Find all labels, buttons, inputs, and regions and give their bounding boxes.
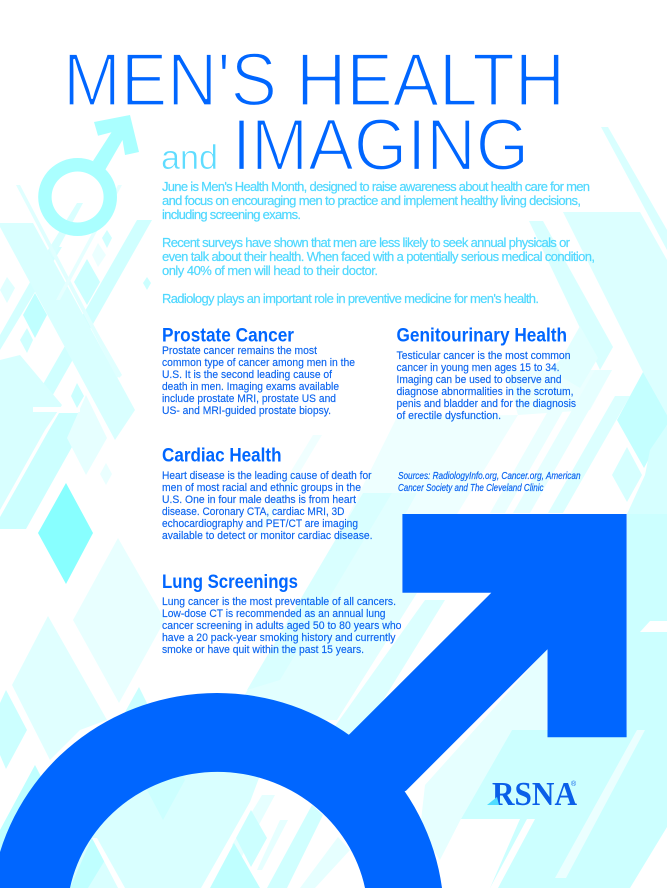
panel: lung screenings: Low-dose CT is recommended as an annual lung [162,608,386,620]
panel: prostate cancer [162,326,355,417]
panel: cardiac health: U.S. One in four male deaths is from heart [162,494,357,506]
panel: genitourinary health: diagnose abnormalities in the scrotum, [396,386,574,398]
panel: genitourinary health: of erectile dysfunction. [396,410,501,422]
intro text: including screening exams. [162,207,301,222]
panel: lung screenings: cancer screening in adults aged 50 to 80 years who [162,620,402,632]
intro text [162,179,595,306]
title: IMAGING [232,103,529,186]
pale bands in the centre [230,415,518,770]
panel: prostate cancer: common type of cancer among men in the [162,357,355,369]
title [63,38,565,186]
panel: genitourinary health: cancer in young men ages 15 to 34. [396,362,560,374]
panel: prostate cancer: include prostate MRI, prostate US and [162,393,336,405]
icon: large male symbol [0,514,627,888]
panel: genitourinary health: penis and bladder and for the diagnosis [396,398,576,410]
right side shapes [420,127,667,888]
panel: lung screenings: Lung Screenings [162,572,298,593]
panel: prostate cancer: Prostate cancer remains the most [162,345,318,357]
panel: cardiac health: Cardiac Health [162,446,282,466]
inside of the large ring [60,687,350,888]
title: and [161,139,218,177]
panel: cardiac health: available to detect or monitor cardiac disease. [162,530,372,542]
panel: prostate cancer: US- and MRI-guided prostate biopsy. [162,405,331,417]
intro text: and focus on encouraging men to practice and implement healthy living decisions, [162,193,581,208]
panel: cardiac health [162,446,372,542]
panel: prostate cancer: death in men. Imaging exams available [162,381,339,393]
icon: aqua diamond [38,483,93,584]
sources note: Cancer Society and The Cleveland Clinic [398,483,544,494]
panel: lung screenings: have a 20 pack-year smoking history and currently [162,632,396,644]
intro text: Recent surveys have shown that men are less likely to seek annual physicals or [162,235,571,250]
panel: lung screenings: smoke or have quit within the past 15 years. [162,644,364,656]
intro text: only 40% of men will head to their doctor. [162,263,378,278]
icon: small male symbol [38,115,139,236]
title: MEN'S HEALTH [63,38,565,122]
panel: genitourinary health: Testicular cancer is the most common [396,350,570,362]
panel: genitourinary health: Imaging can be used to observe and [396,374,562,386]
panel: cardiac health: echocardiography and PET/CT are imaging [162,518,358,530]
intro text: June is Men's Health Month, designed to raise awareness about health care for men [162,179,590,194]
panel: prostate cancer: Prostate Cancer [162,326,295,346]
panel: lung screenings [162,572,402,656]
intro text: even talk about their health. When faced with a potentially serious medical condition, [162,249,595,264]
panel: prostate cancer: U.S. It is the second leading cause of [162,369,333,381]
panel: cardiac health: disease. Coronary CTA, cardiac MRI, 3D [162,506,344,518]
lower left shapes [0,538,165,860]
panel: cardiac health: Heart disease is the leading cause of death for [162,470,372,482]
logo: RSNA: ® [571,780,577,788]
panel: genitourinary health: Genitourinary Health [396,326,567,346]
panel: lung screenings: Lung cancer is the most preventable of all cancers. [162,596,396,608]
intro text: Radiology plays an important role in preventive medicine for men's health. [162,291,539,306]
sources note: Sources: RadiologyInfo.org, Cancer.org, American [398,471,581,482]
sources note [398,471,581,494]
logo: RSNA: RSNA [492,776,577,813]
panel: genitourinary health [396,326,576,422]
panel: cardiac health: men of most racial and ethnic groups in the [162,482,361,494]
